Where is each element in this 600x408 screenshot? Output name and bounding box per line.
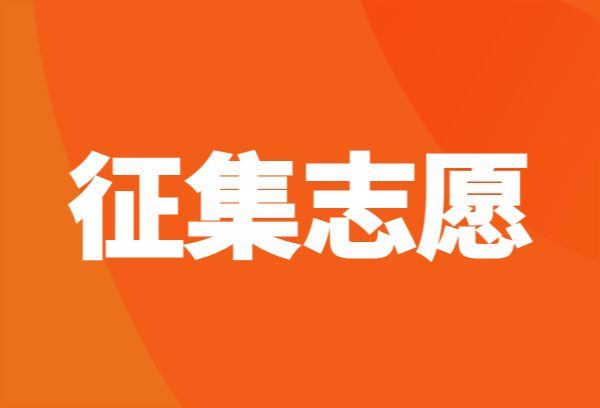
title [67, 147, 534, 273]
title: 集 [184, 147, 302, 273]
title: 愿 [416, 147, 534, 273]
title: 志 [301, 147, 419, 273]
title: 征 [67, 147, 185, 273]
